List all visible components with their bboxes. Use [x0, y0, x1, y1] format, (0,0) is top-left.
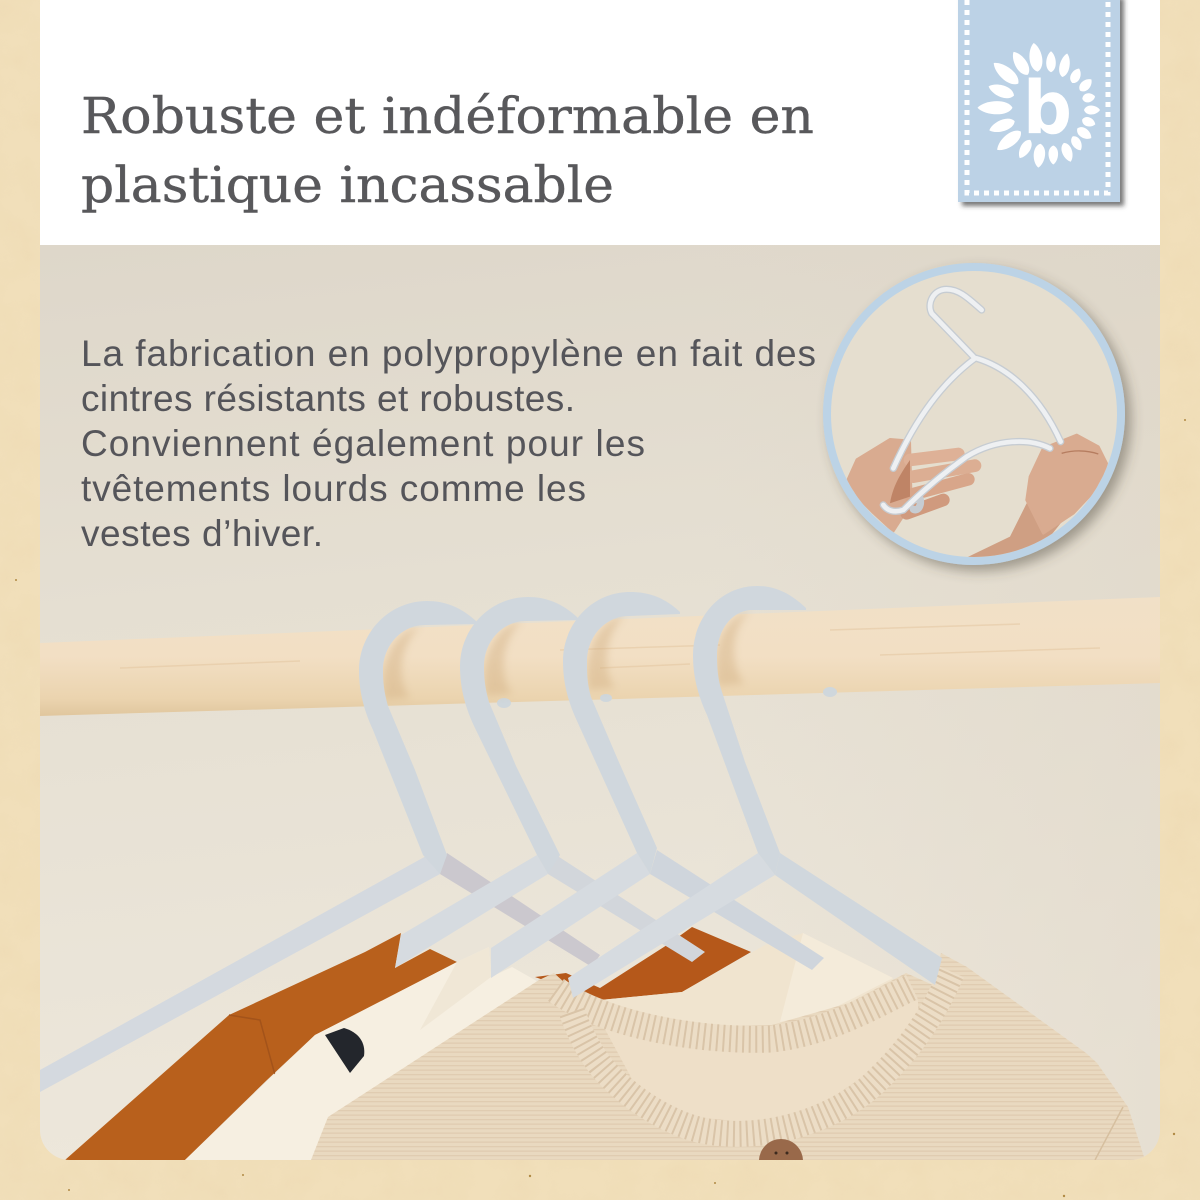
wall background	[40, 245, 1160, 1160]
bent hanger	[883, 289, 1061, 511]
hook tabs under the rod	[497, 687, 837, 708]
description text: cintres résistants et robustes.	[81, 378, 575, 419]
description text	[81, 333, 816, 554]
inset: bending hanger	[827, 267, 1121, 561]
hanger 4	[568, 586, 942, 998]
white header band	[40, 0, 1160, 245]
description text: La fabrication en polypropylène en fait des	[81, 333, 816, 374]
black print on shirt	[325, 1028, 364, 1073]
title: plastique incassable	[81, 156, 614, 214]
hanger 3	[491, 592, 824, 978]
hook shadows on rod	[383, 610, 750, 700]
right hand and arm	[965, 435, 1107, 558]
wooden rod	[40, 597, 1160, 716]
logo: sunflower b	[978, 42, 1100, 168]
description text: tvêtements lourds comme les	[81, 468, 586, 509]
title	[81, 87, 814, 214]
wooden button	[759, 1139, 803, 1160]
logo: sunflower b: b	[1023, 66, 1072, 151]
brand label tag	[958, 0, 1120, 202]
orange garment	[65, 927, 751, 1160]
inside of neckline	[600, 1000, 918, 1123]
photo panel	[40, 245, 1160, 1183]
beige cardigan	[311, 953, 1144, 1160]
tag stitching	[967, 0, 1108, 193]
cream t-shirt	[185, 933, 893, 1160]
hanger 2	[395, 597, 705, 968]
title: Robuste et indéformable en	[81, 87, 814, 145]
description text: vestes d’hiver.	[81, 513, 323, 554]
back neck ribbing	[556, 987, 912, 1039]
description text: Conviennent également pour les	[81, 423, 645, 464]
left hand	[847, 439, 975, 532]
front collar ribbing	[572, 972, 952, 1134]
hanger 1	[40, 601, 600, 1092]
